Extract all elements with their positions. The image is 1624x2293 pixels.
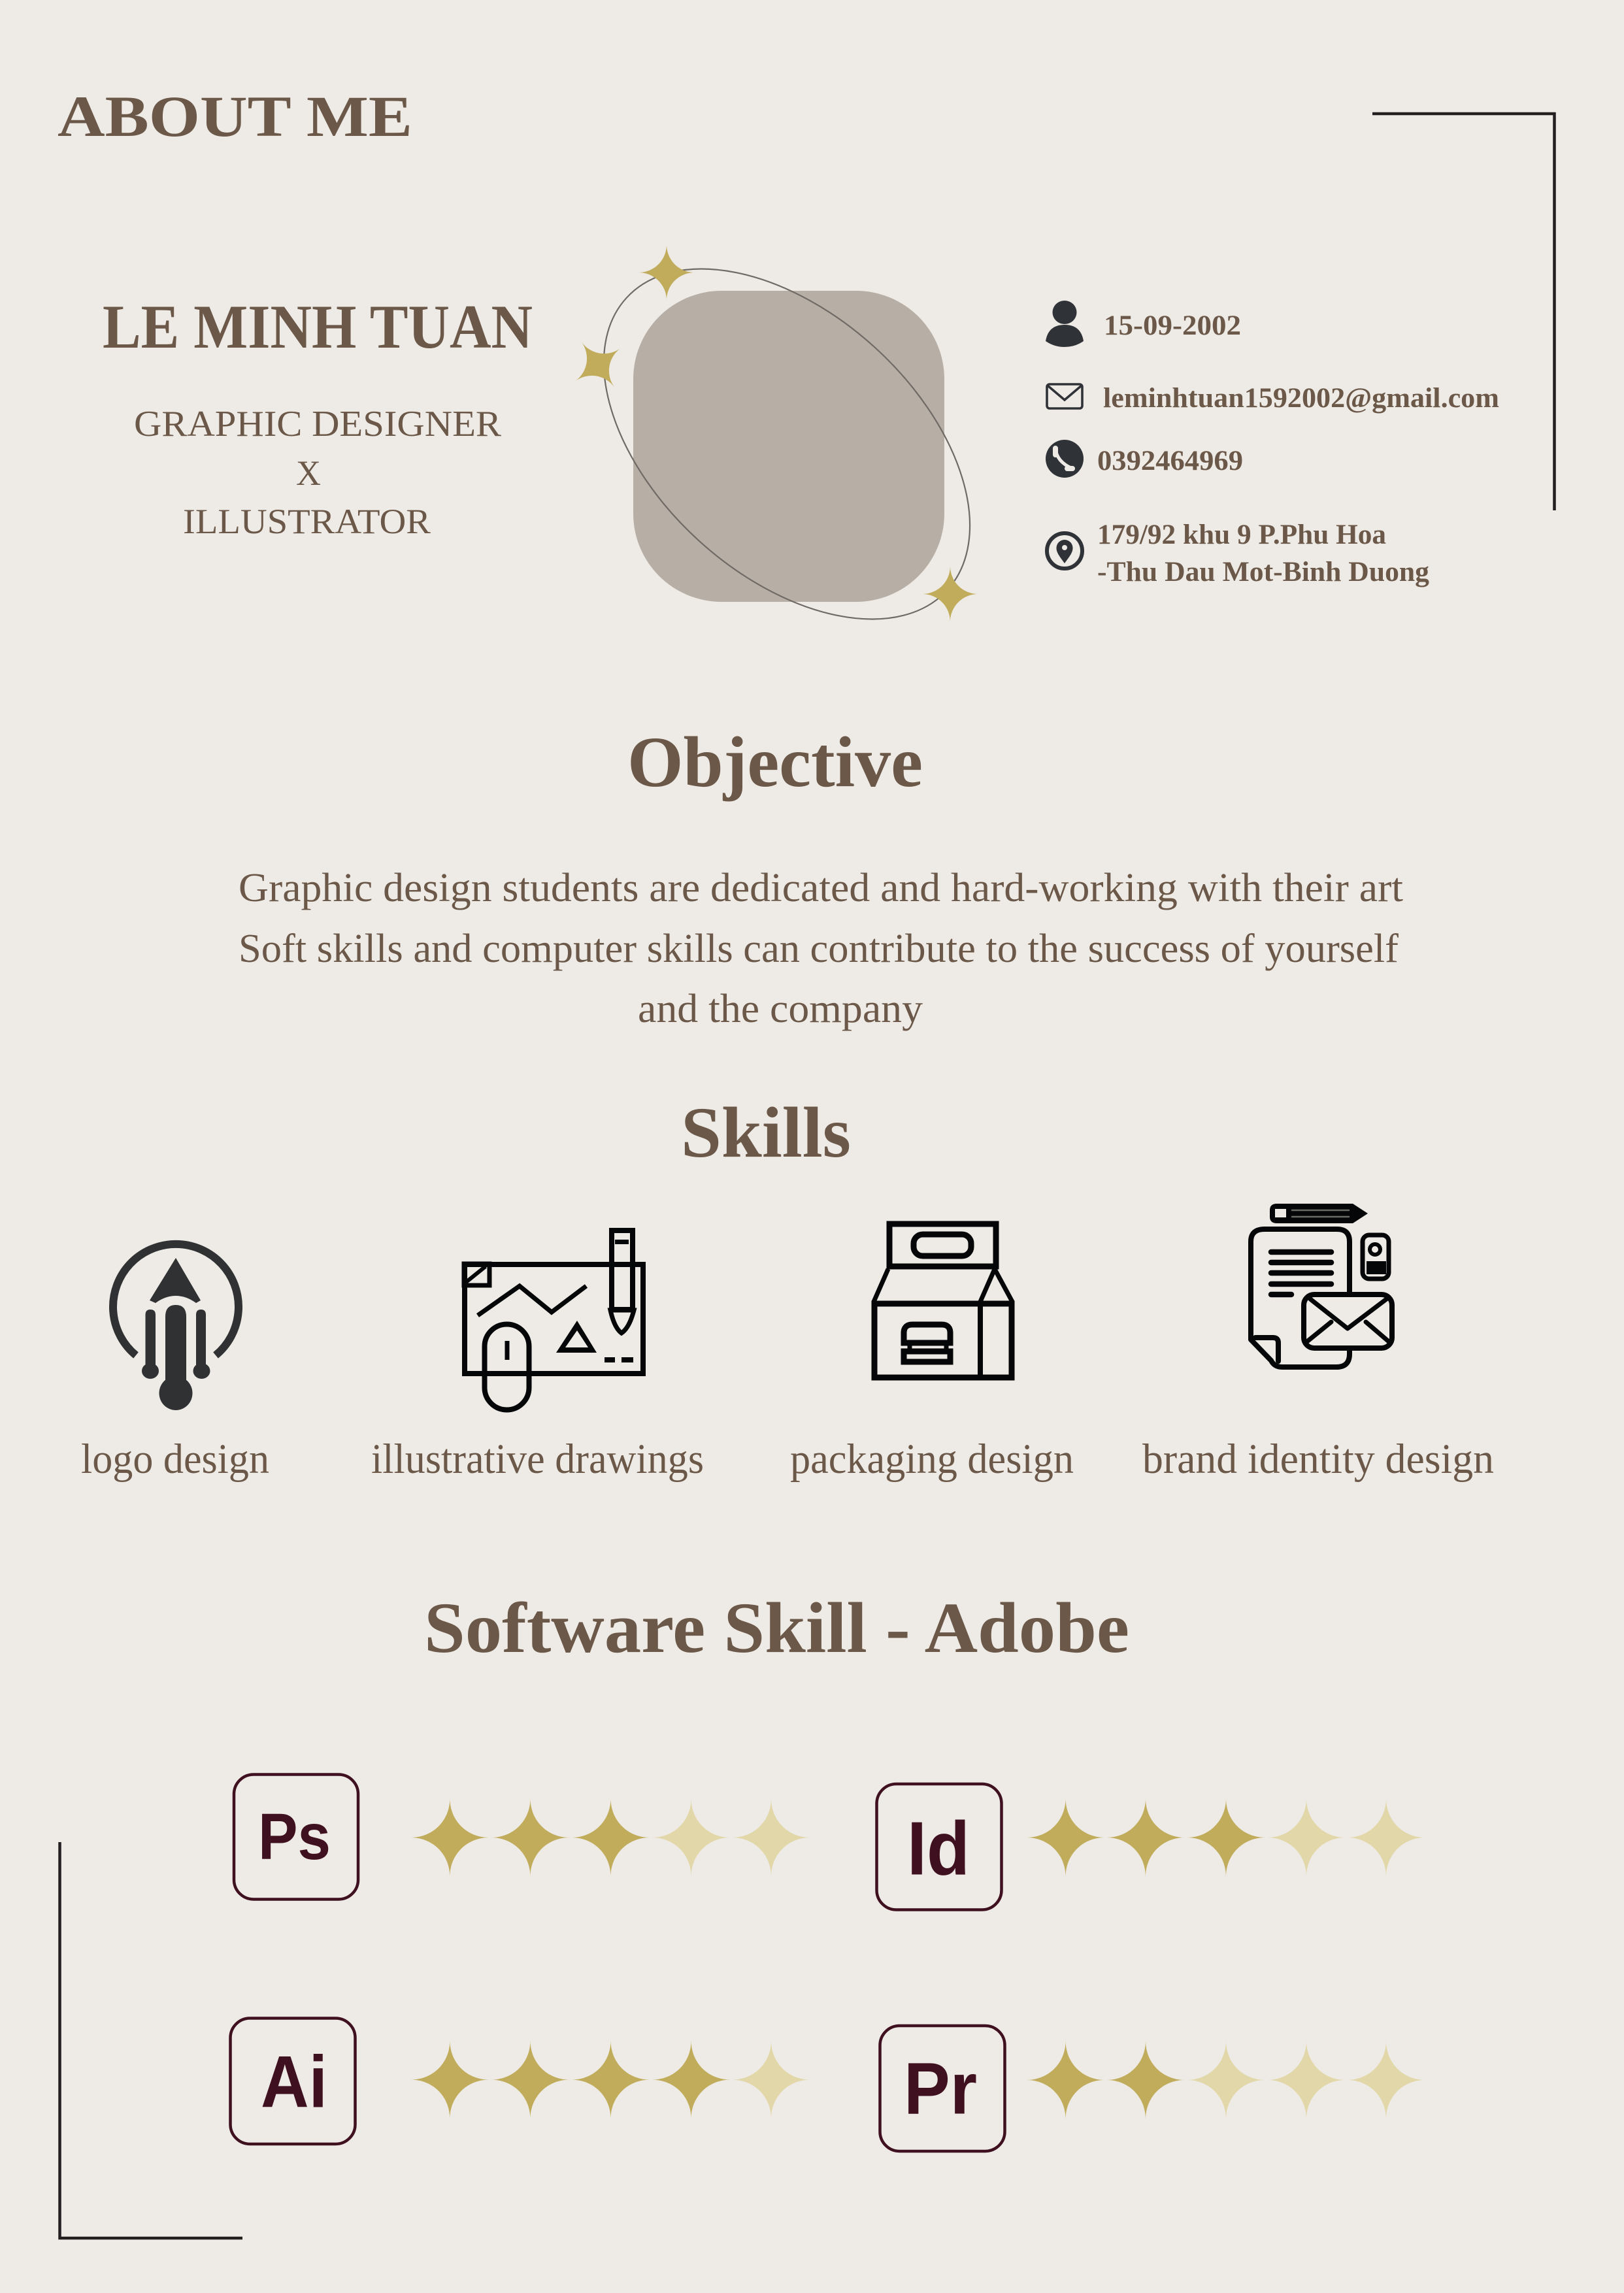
icon: pencil logo <box>113 1244 239 1410</box>
sparkle: top <box>638 244 695 301</box>
panel: illustrator rating <box>230 2018 810 2144</box>
icon: person <box>1046 301 1084 347</box>
heading: software skill: Software Skill - Adobe <box>424 1588 1129 1668</box>
date of birth: 15-09-2002 <box>1104 310 1241 341</box>
sparkle: bottom right <box>922 566 978 622</box>
icon: location pin <box>1047 533 1082 569</box>
label: packaging design <box>790 1436 1074 1483</box>
panel: skill illustrative drawings <box>371 1230 704 1483</box>
objective paragraph: and the company <box>638 987 923 1031</box>
label: brand identity design <box>1142 1436 1494 1483</box>
badge: Ai: Ai <box>261 2041 327 2122</box>
panel: indesign rating <box>877 1784 1425 1909</box>
name: LE MINH TUAN <box>103 292 533 361</box>
panel: skill packaging design <box>790 1224 1074 1483</box>
address line 1: 179/92 khu 9 P.Phu Hoa <box>1097 520 1386 550</box>
badge: Ps: Ps <box>258 1800 331 1873</box>
star rating 3 of 5 <box>1027 1798 1425 1877</box>
icon: packaging box <box>874 1224 1012 1377</box>
email: leminhtuan1592002@gmail.com <box>1103 383 1499 414</box>
icon: drawing board with mouse and pencil <box>464 1230 643 1410</box>
star rating 3 of 5 <box>410 1798 810 1877</box>
star rating 2 of 5 <box>1027 2041 1425 2119</box>
objective paragraph: Soft skills and computer skills can contribute to the success of yourself <box>239 927 1399 971</box>
heading: skills: Skills <box>681 1093 851 1172</box>
icon: phone <box>1046 440 1084 478</box>
corner bracket: bottom left <box>60 1842 242 2238</box>
badge: Id: Id <box>907 1806 970 1891</box>
role: illustrator: ILLUSTRATOR <box>183 502 431 541</box>
sparkle: left <box>559 325 637 404</box>
role: x: X <box>296 454 321 493</box>
panel: premiere rating <box>880 2026 1425 2151</box>
label: logo design <box>81 1436 269 1483</box>
panel: contact details <box>1046 301 1499 587</box>
role: graphic designer: GRAPHIC DESIGNER <box>134 404 502 444</box>
icon: stationery set <box>1251 1204 1392 1367</box>
heading: about me: ABOUT ME <box>58 85 412 149</box>
orbit ellipse <box>539 201 1035 687</box>
panel: skill brand identity design <box>1142 1204 1494 1483</box>
badge: Ps <box>234 1775 358 1899</box>
icon: envelope <box>1047 384 1082 408</box>
star rating 4 of 5 <box>410 2041 810 2119</box>
panel: photoshop rating <box>234 1775 810 1899</box>
objective paragraph <box>239 866 1403 1031</box>
portrait shape <box>633 291 944 602</box>
corner bracket: top right <box>1372 114 1554 510</box>
objective paragraph: Graphic design students are dedicated and hard-working with their art <box>239 866 1403 910</box>
badge: Id <box>877 1784 1001 1909</box>
address line 2: -Thu Dau Mot-Binh Duong <box>1097 557 1429 587</box>
badge: Pr <box>880 2026 1005 2151</box>
heading: objective: Objective <box>627 722 923 802</box>
panel: skill logo design <box>81 1244 269 1483</box>
portrait placeholder with orbit and sparkles <box>539 201 1035 687</box>
badge: Pr: Pr <box>904 2048 977 2130</box>
label: illustrative drawings <box>371 1436 704 1483</box>
panel: name and role <box>103 292 533 541</box>
badge: Ai <box>230 2018 356 2144</box>
phone number: 0392464969 <box>1097 446 1243 476</box>
